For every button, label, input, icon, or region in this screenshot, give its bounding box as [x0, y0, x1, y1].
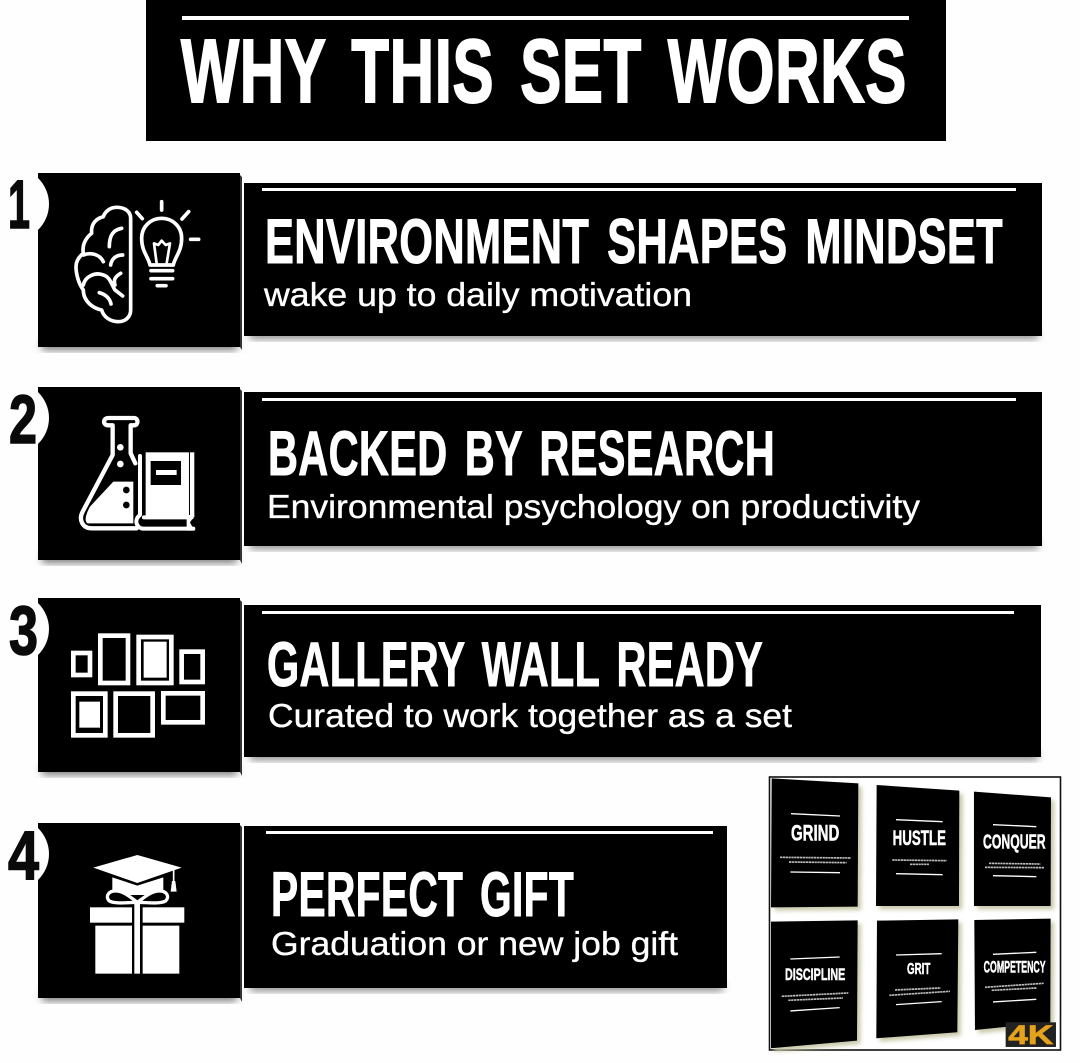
subtitle 2: Environmental psychology on productivity — [267, 488, 921, 525]
title banner — [146, 0, 946, 141]
panel: step 2 — [0, 381, 1042, 564]
icon: graduation cap on gift box — [90, 855, 184, 974]
panel: step 4 — [0, 817, 727, 1002]
icon: gallery wall frames — [73, 636, 203, 735]
text panel 2 — [244, 392, 1042, 546]
icon: brain and light bulb — [76, 202, 199, 322]
poster: GRIT — [876, 919, 958, 1038]
poster: GRIT: GRIT — [907, 961, 931, 978]
poster: DISCIPLINE — [771, 920, 858, 1048]
poster: CONQUER — [974, 792, 1051, 906]
icon box 2 — [0, 381, 242, 564]
product photo: six canvas posters — [770, 777, 1060, 1052]
heading 2: BACKED BY RESEARCH — [268, 419, 775, 489]
panel: step 3 — [0, 592, 1041, 776]
panel: step 1 — [0, 166, 1042, 350]
text panel 4 — [244, 826, 727, 988]
badge: 4K — [1006, 1020, 1056, 1050]
subtitle 3: Curated to work together as a set — [268, 697, 792, 734]
poster: GRIND: GRIND — [791, 821, 839, 846]
icon box 3 — [0, 592, 242, 776]
poster: GRIND — [771, 778, 858, 907]
number 4: 4 — [8, 817, 39, 894]
icon box 4 — [0, 817, 242, 1002]
heading 4: PERFECT GIFT — [271, 860, 574, 930]
text panel 1 — [244, 183, 1042, 336]
subtitle 4: Graduation or new job gift — [271, 925, 678, 962]
icon box 1 — [0, 166, 242, 350]
poster: COMPETENCY — [974, 919, 1051, 1030]
heading 3: GALLERY WALL READY — [267, 630, 763, 700]
number 1: 1 — [8, 166, 30, 243]
subtitle 1: wake up to daily motivation — [263, 276, 692, 313]
poster: HUSTLE: HUSTLE — [893, 826, 946, 850]
poster: HUSTLE — [876, 785, 959, 906]
poster: DISCIPLINE: DISCIPLINE — [785, 965, 845, 984]
badge: 4K: 4K — [1008, 1020, 1053, 1050]
number 3: 3 — [9, 592, 38, 669]
text panel 3 — [244, 605, 1041, 757]
icon: flask and book — [81, 418, 195, 531]
number 2: 2 — [9, 381, 37, 458]
